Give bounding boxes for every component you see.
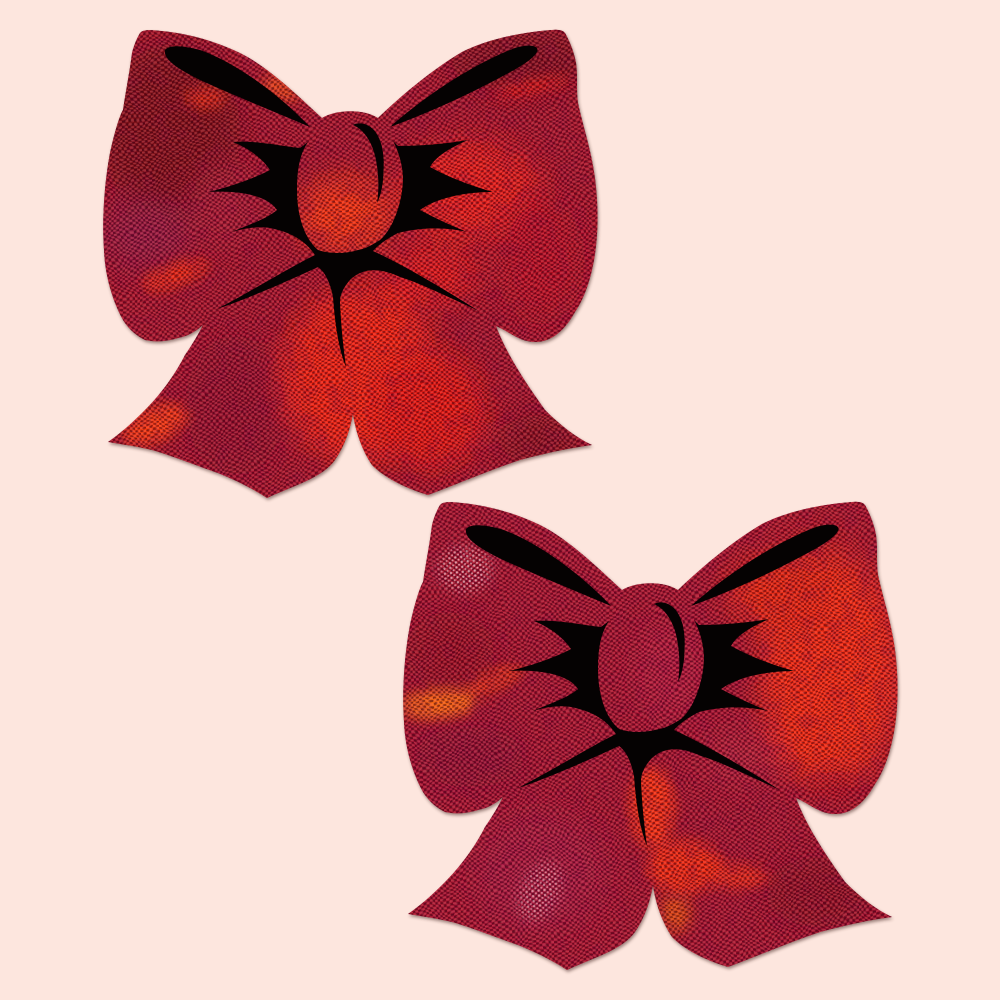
illustration: two red holographic bows <box>102 30 901 974</box>
bow 2 black markings <box>466 525 838 846</box>
bow 1 edge shadow <box>104 32 599 500</box>
bow 2 (lower right) <box>380 492 910 982</box>
bow 2 fabric <box>403 502 898 970</box>
bow 2 edge shadow <box>404 504 899 972</box>
bow 1 (upper left) <box>80 20 610 510</box>
bow 1 fabric <box>103 30 598 498</box>
bow 1 black markings <box>165 46 537 367</box>
bow 2 sparkle highlights <box>400 522 590 952</box>
